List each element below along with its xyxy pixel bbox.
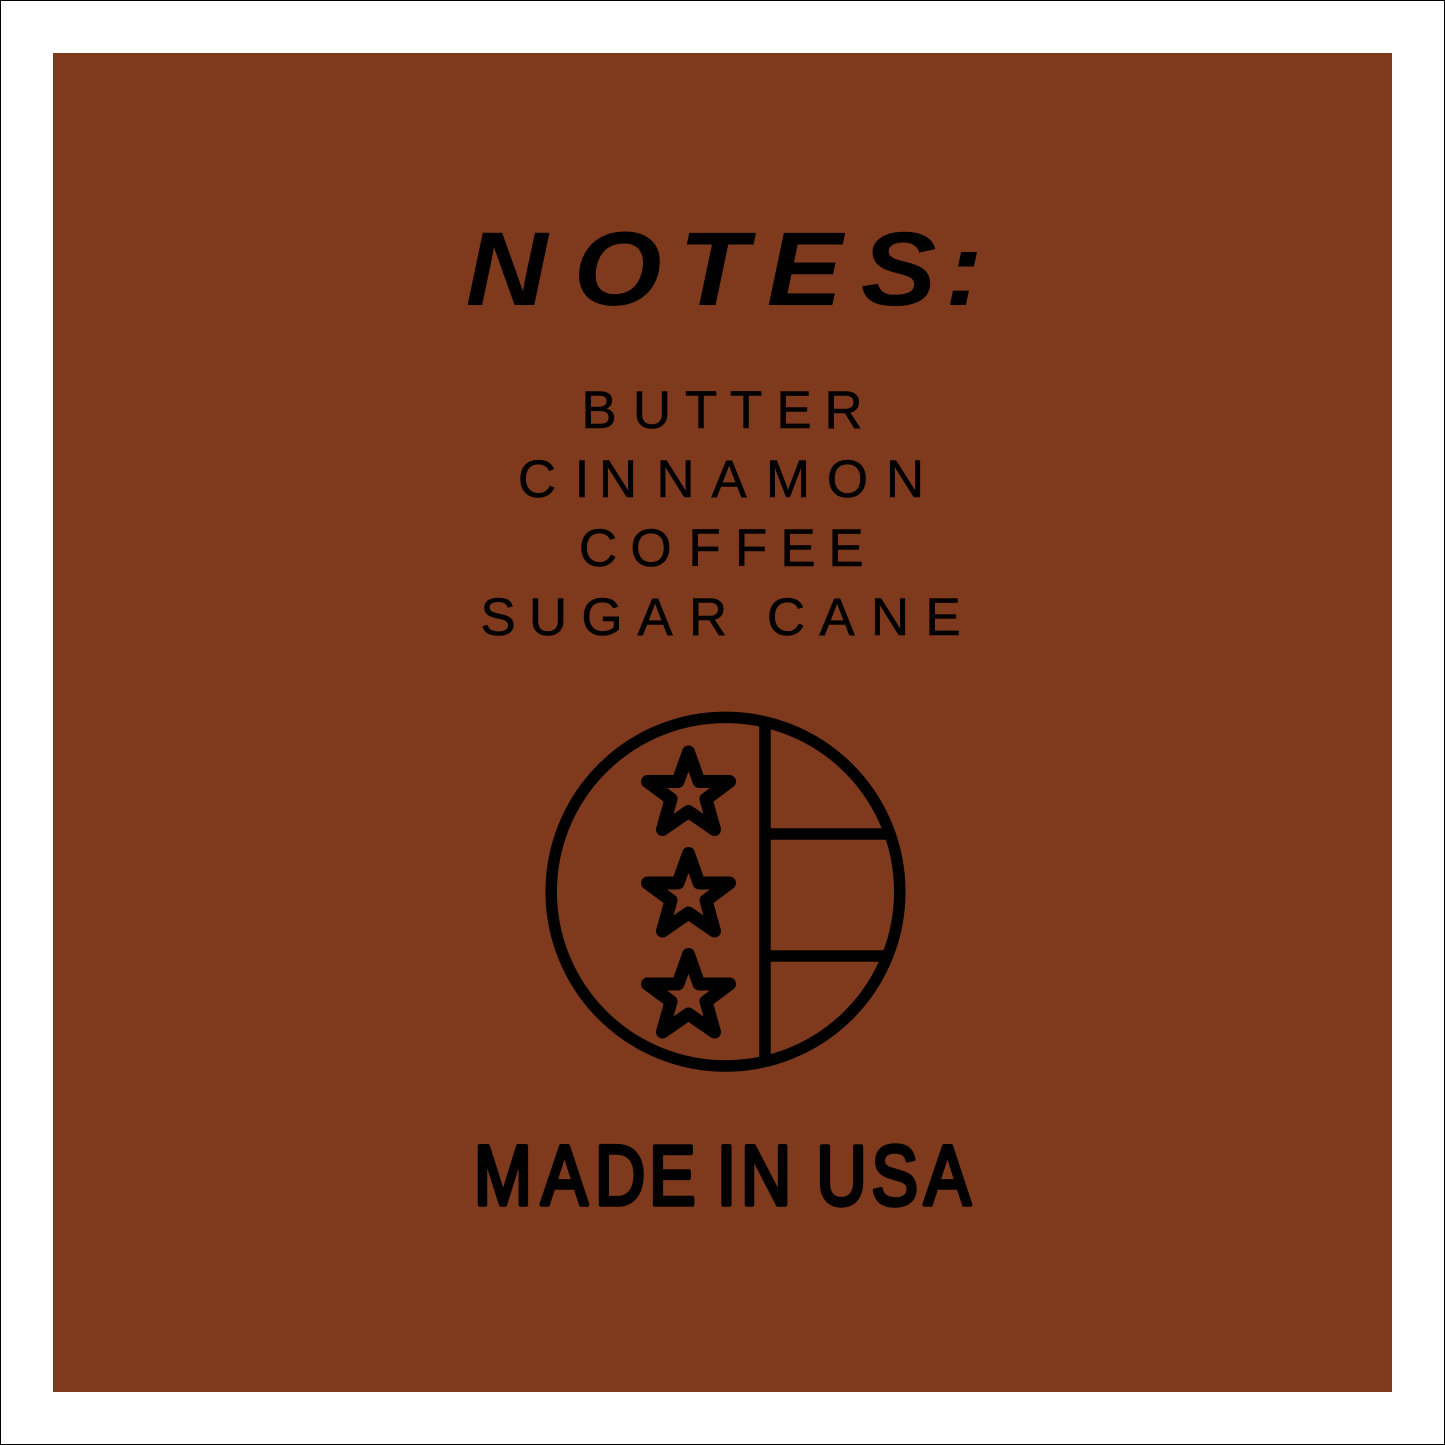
title: NOTES: [466,211,983,328]
text block: flavor notes [480,381,961,647]
icon: bottom star [648,954,730,1032]
caption: made in usa: MADE IN USA [474,1129,971,1223]
icon: top star [648,752,730,830]
text block: flavor notes: SUGAR CANE [480,588,961,647]
text block: flavor notes: COFFEE [579,519,864,578]
text block: flavor notes: CINNAMON [518,450,924,509]
text block: flavor notes: BUTTER [581,381,863,440]
icon: middle star [648,854,730,931]
icon: USA flag globe [551,717,900,1066]
